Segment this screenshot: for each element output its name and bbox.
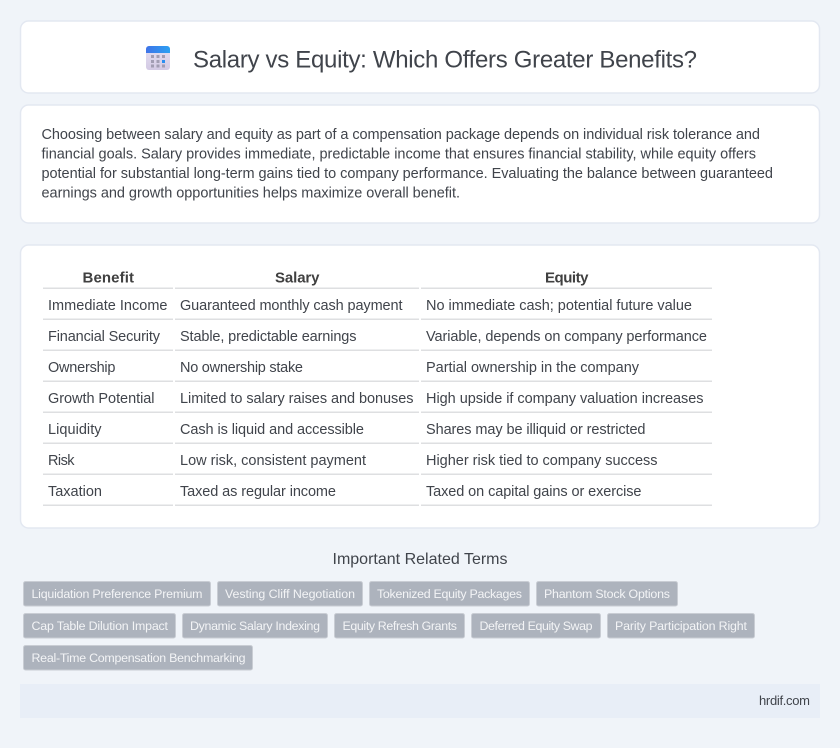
table row: risk: Higher risk tied to company success	[426, 453, 658, 469]
tag list: related terms	[24, 582, 754, 670]
tag	[608, 614, 754, 638]
table row: immediate income: Immediate Income	[48, 298, 168, 314]
tag	[536, 582, 678, 606]
table header row: Equity	[545, 270, 589, 286]
tag: Tokenized Equity Packages	[377, 587, 522, 601]
tag	[24, 646, 252, 670]
tag	[24, 582, 210, 606]
tag: Equity Refresh Grants	[342, 619, 457, 633]
tag: Phantom Stock Options	[544, 587, 670, 601]
table row: liquidity: Liquidity	[48, 422, 102, 438]
tag: Dynamic Salary Indexing	[190, 619, 320, 633]
table row: ownership: Partial ownership in the company	[426, 360, 640, 376]
footer	[20, 684, 820, 718]
tag: Deferred Equity Swap	[480, 619, 593, 633]
tag	[24, 614, 176, 638]
table row: growth potential	[48, 391, 704, 407]
tag	[370, 582, 530, 606]
text block: introduction: Choosing between salary and equity as part of a compensation package depends on individual risk tolerance and	[42, 127, 760, 143]
tag: Vesting Cliff Negotiation	[225, 587, 355, 601]
table row: risk	[48, 453, 658, 469]
footer: hrdif.com	[759, 693, 810, 708]
table header row: Benefit	[82, 270, 134, 286]
table row: taxation: Taxation	[48, 484, 102, 500]
text block: introduction: potential for substantial long-term gains tied to company performance. Evaluating the balance between guaranteed	[42, 166, 773, 182]
table row: growth potential: Growth Potential	[48, 391, 154, 407]
table row: immediate income: No immediate cash; potential future value	[426, 298, 692, 314]
heading: related terms: Important Related Terms	[332, 551, 508, 568]
table row: ownership: Ownership	[48, 360, 116, 376]
icon: calendar	[146, 46, 170, 70]
tag: Parity Participation Right	[615, 619, 748, 633]
table row: liquidity: Shares may be illiquid or restricted	[426, 422, 646, 438]
text block: introduction	[42, 127, 773, 202]
table row: liquidity: Cash is liquid and accessible	[180, 422, 364, 438]
table row: taxation: Taxed on capital gains or exercise	[426, 484, 642, 500]
table row: risk: Risk	[48, 453, 75, 469]
text block: introduction: earnings and growth opportunities helps maximize overall benefit.	[42, 186, 460, 202]
table row: growth potential: High upside if company valuation increases	[426, 391, 704, 407]
table row: financial security: Stable, predictable earnings	[180, 329, 356, 345]
tag: Liquidation Preference Premium	[32, 587, 202, 601]
table row: immediate income	[48, 298, 692, 314]
table header row: Salary	[275, 270, 320, 286]
table row: ownership: No ownership stake	[180, 360, 303, 376]
table row: taxation: Taxed as regular income	[180, 484, 336, 500]
tag: Cap Table Dilution Impact	[32, 619, 169, 633]
table row: liquidity	[48, 422, 646, 438]
panel: header	[20, 21, 820, 93]
table header row	[82, 270, 589, 286]
tag	[334, 614, 464, 638]
table row: ownership	[48, 360, 640, 376]
table row: financial security	[48, 329, 707, 345]
tag: Real-Time Compensation Benchmarking	[32, 651, 246, 665]
table row: financial security: Variable, depends on company performance	[426, 329, 707, 345]
table row: immediate income: Guaranteed monthly cash payment	[180, 298, 402, 314]
tag	[182, 614, 328, 638]
table row: growth potential: Limited to salary raises and bonuses	[180, 391, 414, 407]
panel: introduction	[20, 105, 820, 223]
table row: financial security: Financial Security	[48, 329, 161, 345]
tag	[218, 582, 362, 606]
title: Salary vs Equity: Which Offers Greater Benefits?	[193, 46, 697, 74]
panel: comparison table	[20, 245, 820, 528]
table row: risk: Low risk, consistent payment	[180, 453, 366, 469]
text block: introduction: financial goals. Salary provides immediate, predictable income that ensures financial stability, while equity offers	[42, 146, 756, 162]
table row: taxation	[48, 484, 642, 500]
tag	[472, 614, 600, 638]
